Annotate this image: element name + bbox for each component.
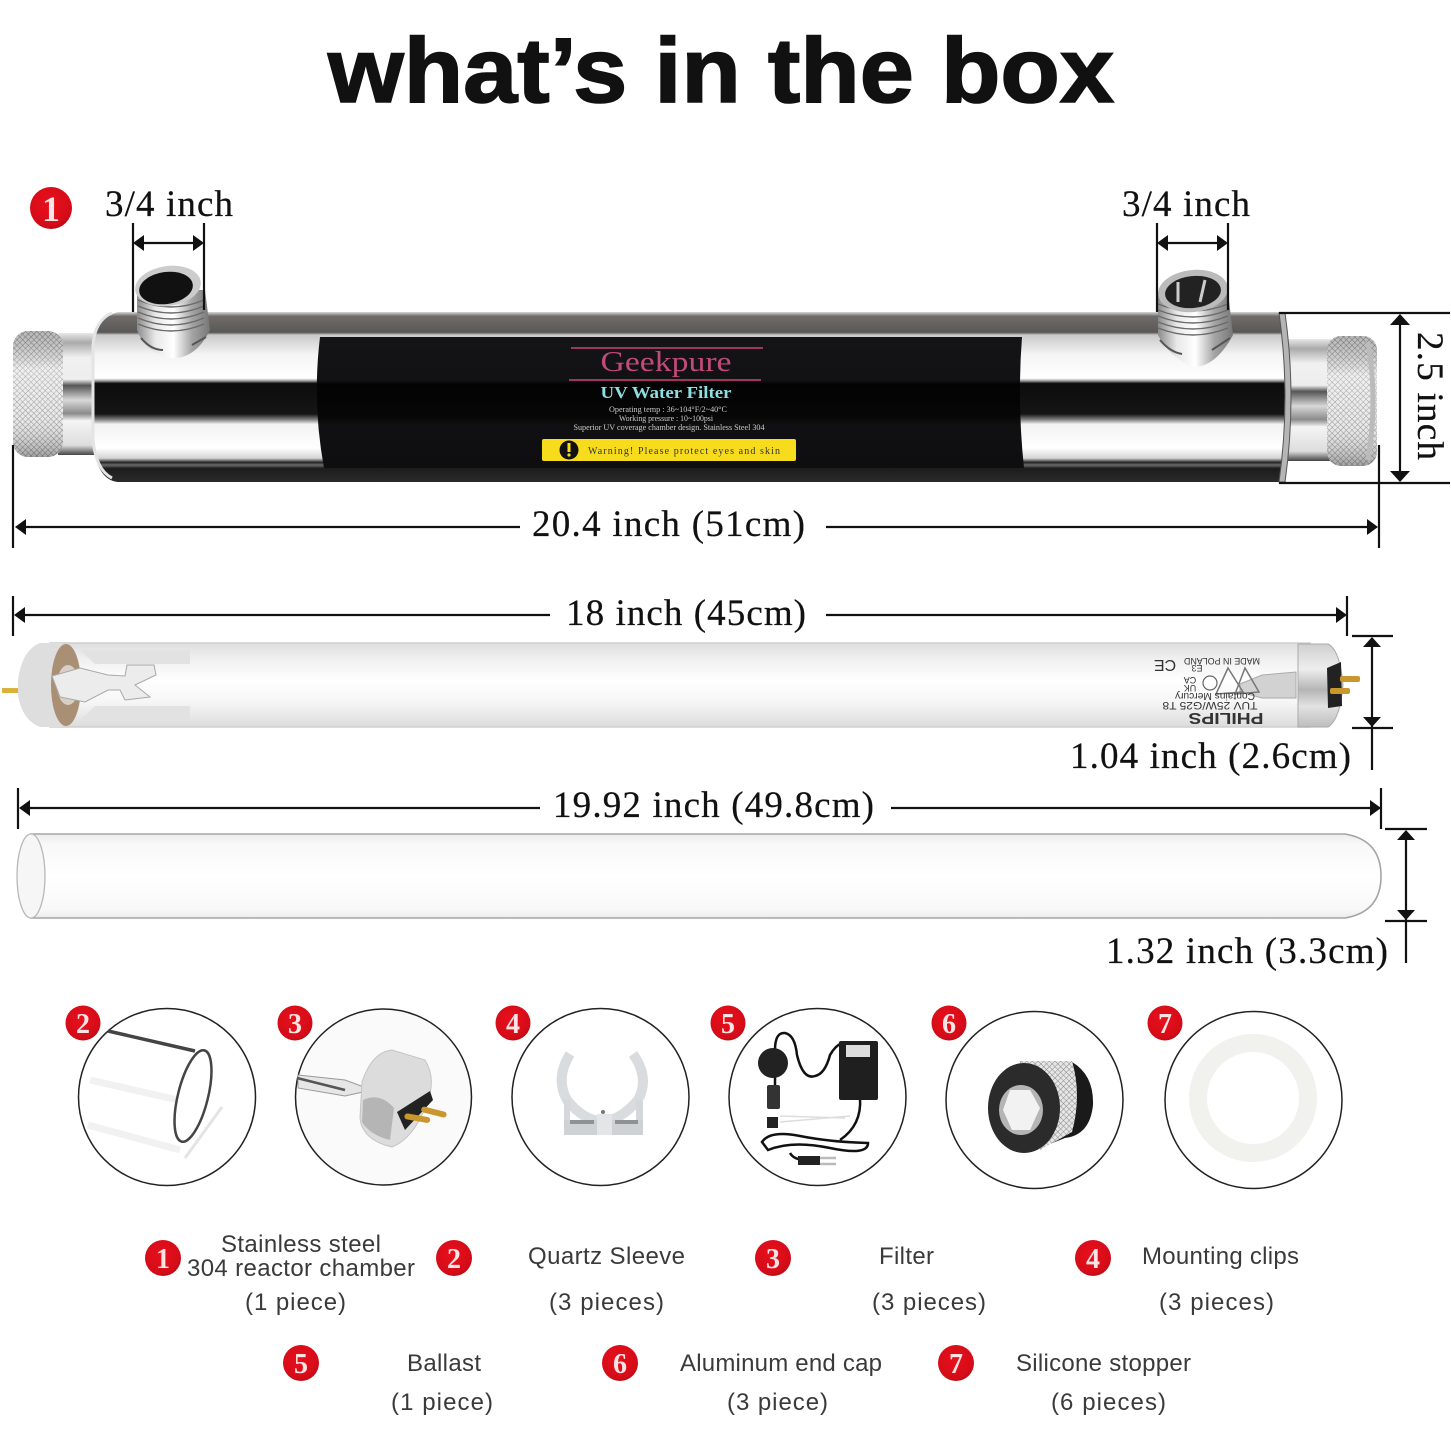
item 7: silicone stopper: Silicone stopper	[1016, 1350, 1191, 1377]
badge 1 (chamber): 1	[42, 189, 60, 229]
dimension: lamp length: 18 inch (45cm)	[566, 593, 806, 634]
badge 5: 5	[721, 1009, 735, 1040]
dimension: right port 3/4 inch: 3/4 inch	[1122, 184, 1250, 225]
warning sticker: Warning! Please protect eyes and skin	[588, 446, 780, 457]
UV lamp	[2, 643, 1360, 727]
badge 7: 7	[1158, 1009, 1172, 1040]
item 1: reactor chamber: 1	[156, 1244, 170, 1275]
item 3: filter	[755, 1240, 986, 1316]
warning sticker	[542, 439, 796, 461]
right knurled nut	[1284, 336, 1377, 466]
item 4: mounting clips: Mounting clips	[1142, 1243, 1299, 1270]
spec text: Operating temp : 36~104°F/2~40°C	[609, 405, 727, 414]
item 5: ballast	[283, 1345, 493, 1416]
badge 2	[66, 1006, 100, 1040]
dimension: right port 3/4 inch	[1122, 184, 1250, 312]
item 6: aluminum end cap: Aluminum end cap	[680, 1350, 882, 1377]
item 5: ballast: (1 piece)	[391, 1389, 493, 1416]
item 7: silicone stopper: (6 pieces)	[1051, 1389, 1166, 1416]
quartz sleeve	[17, 834, 1381, 918]
dimension: chamber diameter: 2.5 inch	[1409, 332, 1450, 460]
dimension: lamp diameter: 1.04 inch (2.6cm)	[1070, 736, 1351, 777]
lamp printing: UK	[1184, 683, 1196, 693]
steel body	[93, 312, 1284, 482]
item 2: quartz sleeve	[436, 1240, 685, 1316]
right port	[1156, 266, 1233, 367]
item 1: reactor chamber	[145, 1231, 415, 1316]
circle: UV lamp end detail	[296, 1009, 472, 1185]
lamp printing: TUV 25W/G25 T8	[1162, 699, 1258, 711]
spec text	[574, 405, 764, 432]
parts list	[145, 1231, 1299, 1416]
brand name: Geekpure	[600, 346, 732, 378]
dimension: chamber diameter	[1279, 313, 1450, 483]
left lamp end	[2, 643, 190, 727]
dimension: chamber length	[13, 445, 1379, 548]
item 4: mounting clips: 4	[1086, 1244, 1100, 1275]
item 7: silicone stopper: 7	[949, 1349, 963, 1380]
item 1: reactor chamber: (1 piece)	[245, 1289, 346, 1316]
item 6: aluminum end cap: (3 piece)	[727, 1389, 828, 1416]
badge 6	[932, 1006, 966, 1040]
title: what’s in the box	[327, 20, 1114, 122]
right lamp end	[1203, 644, 1360, 727]
badge 6: 6	[942, 1009, 956, 1040]
badge 4: 4	[506, 1009, 520, 1040]
circle: mounting clip	[512, 1008, 689, 1186]
dimension: left port 3/4 inch	[105, 184, 234, 312]
item 5: ballast: 5	[294, 1349, 308, 1380]
dimension: chamber length: 20.4 inch (51cm)	[532, 504, 805, 545]
left port	[133, 262, 210, 358]
spec text: Working pressure : 10~100psi	[619, 414, 714, 423]
left knurled nut	[13, 331, 98, 457]
circle: aluminum end cap	[946, 1012, 1123, 1188]
badge 1 (chamber)	[30, 187, 72, 229]
left body rim	[93, 313, 112, 478]
item 3: filter: 3	[766, 1244, 780, 1275]
lamp printing	[1154, 656, 1264, 726]
lamp printing: CA	[1184, 675, 1196, 685]
badge 2: 2	[76, 1009, 90, 1040]
circle badges	[66, 1006, 1182, 1040]
badge 3	[278, 1006, 312, 1040]
lamp tube	[50, 643, 1310, 727]
lamp printing: MADE IN POLAND	[1184, 656, 1260, 666]
lamp printing: CE	[1154, 656, 1176, 673]
black label	[317, 337, 1024, 468]
badge 7	[1148, 1006, 1182, 1040]
badge 3: 3	[288, 1009, 302, 1040]
item 1: reactor chamber: Stainless steel	[221, 1231, 381, 1258]
dimension: sleeve length	[18, 785, 1381, 829]
item 6: aluminum end cap	[602, 1345, 882, 1416]
brand rules	[569, 348, 763, 380]
circle: ballast and cables	[729, 1008, 906, 1186]
dimension: sleeve length: 19.92 inch (49.8cm)	[553, 785, 874, 826]
dimension: lamp diameter	[1070, 636, 1393, 777]
item 3: filter: (3 pieces)	[872, 1289, 986, 1316]
item 2: quartz sleeve: 2	[447, 1244, 461, 1275]
item 1: reactor chamber: 304 reactor chamber	[187, 1255, 415, 1282]
dimension: sleeve diameter: 1.32 inch (3.3cm)	[1106, 931, 1388, 972]
item 2: quartz sleeve: (3 pieces)	[549, 1289, 664, 1316]
circle: quartz sleeve detail	[78, 1008, 256, 1186]
lamp printing: E3	[1191, 663, 1203, 673]
item 3: filter: Filter	[879, 1243, 934, 1270]
item 4: mounting clips: (3 pieces)	[1159, 1289, 1274, 1316]
lamp printing: PHILIPS	[1188, 709, 1264, 726]
lamp printing: Contains Mercury	[1175, 690, 1255, 701]
right flange	[1279, 313, 1291, 482]
item 2: quartz sleeve: Quartz Sleeve	[528, 1243, 685, 1270]
circle: silicone stopper	[1165, 1012, 1342, 1188]
product name: UV Water Filter	[600, 383, 732, 402]
item 5: ballast: Ballast	[407, 1350, 481, 1377]
item 6: aluminum end cap: 6	[613, 1349, 627, 1380]
dimension: sleeve diameter	[1106, 829, 1427, 972]
dimension: lamp length	[13, 593, 1347, 636]
badge 5	[710, 1006, 746, 1040]
item 7: silicone stopper	[938, 1345, 1191, 1416]
badge 4	[496, 1006, 530, 1040]
spec text: Superior UV coverage chamber design. Stainless Steel 304	[574, 423, 764, 432]
reactor chamber	[13, 262, 1377, 482]
dimension: left port 3/4 inch: 3/4 inch	[105, 184, 234, 225]
item 4: mounting clips	[1075, 1240, 1299, 1316]
